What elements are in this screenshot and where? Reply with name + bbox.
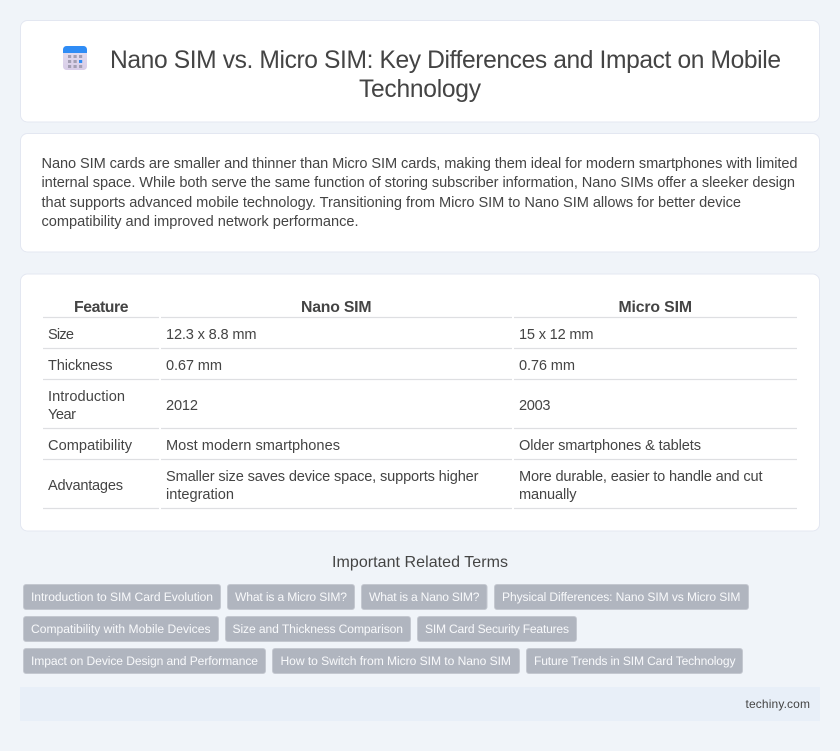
heading: important related terms: Important Related Terms — [332, 554, 508, 571]
table row: size — [48, 327, 594, 343]
title: Nano SIM vs. Micro SIM: Key Differences and Impact on Mobile — [110, 47, 781, 74]
table row: thickness: Thickness — [48, 358, 112, 374]
table row: advantages: manually — [519, 487, 577, 503]
tag — [24, 584, 220, 610]
table row: thickness: 0.67 mm — [166, 358, 222, 374]
tag: Future Trends in SIM Card Technology — [534, 654, 736, 668]
tag — [228, 584, 354, 610]
table row: introduction year: 2012 — [166, 398, 198, 414]
table row: thickness: 0.76 mm — [519, 358, 575, 374]
tag — [24, 616, 218, 642]
table header: Feature — [74, 299, 129, 316]
tag — [24, 648, 266, 674]
tag: What is a Micro SIM? — [235, 590, 347, 604]
title: Technology — [359, 76, 482, 103]
table row: compatibility: Older smartphones & tablets — [519, 438, 701, 454]
panel: introduction — [20, 134, 820, 252]
table row: advantages: integration — [166, 487, 234, 503]
table row: compatibility — [48, 438, 701, 454]
icon: calendar — [63, 46, 87, 70]
table row: compatibility: Most modern smartphones — [166, 438, 340, 454]
footer source text: techiny.com — [746, 697, 810, 711]
table header: Nano SIM — [301, 299, 372, 316]
table row: advantages: More durable, easier to handle and cut — [519, 469, 762, 485]
tag: Introduction to SIM Card Evolution — [31, 590, 213, 604]
tag: SIM Card Security Features — [425, 622, 569, 636]
table header — [74, 299, 692, 316]
table row: size: Size — [48, 327, 74, 343]
tag — [362, 584, 487, 610]
table row: introduction year: Introduction — [48, 389, 125, 405]
panel: related term tags — [24, 584, 748, 674]
tag — [526, 648, 742, 674]
panel: comparison table — [20, 274, 820, 531]
title — [110, 47, 781, 103]
tag — [272, 648, 520, 674]
table row: size: 15 x 12 mm — [519, 327, 594, 343]
tag — [226, 616, 410, 642]
table row: advantages — [48, 469, 762, 503]
table row: advantages: Smaller size saves device space, supports higher — [166, 469, 479, 485]
footer bar — [20, 687, 820, 721]
table row: advantages: Advantages — [48, 478, 123, 494]
text block: introduction paragraph: internal space. While both serve the same function of storing subscriber information, Nano SIMs offer a sleeker design — [42, 175, 795, 191]
text block: introduction paragraph: compatibility and improved network performance. — [42, 214, 358, 230]
tag: Physical Differences: Nano SIM vs Micro SIM — [502, 590, 740, 604]
panel: title header — [20, 20, 820, 122]
tag — [494, 584, 748, 610]
table row: thickness — [48, 358, 575, 374]
tag: How to Switch from Micro SIM to Nano SIM — [280, 654, 511, 668]
tag: Impact on Device Design and Performance — [31, 654, 258, 668]
tag — [418, 616, 576, 642]
tag: What is a Nano SIM? — [369, 590, 480, 604]
text block: introduction paragraph: that supports advanced mobile technology. Transitioning from Micro SIM to Nano SIM allows for better device — [42, 195, 741, 211]
table row: introduction year — [48, 389, 550, 423]
text block: introduction paragraph — [42, 156, 798, 230]
table header: Micro SIM — [618, 299, 692, 316]
table row: compatibility: Compatibility — [48, 438, 133, 454]
table row: size: 12.3 x 8.8 mm — [166, 327, 256, 343]
tag: Compatibility with Mobile Devices — [31, 622, 210, 636]
tag: Size and Thickness Comparison — [232, 622, 403, 636]
table row: introduction year: 2003 — [519, 398, 550, 414]
text block: introduction paragraph: Nano SIM cards are smaller and thinner than Micro SIM cards, making them ideal for modern smartphones with limited — [42, 156, 798, 172]
table row: introduction year: Year — [48, 407, 76, 423]
